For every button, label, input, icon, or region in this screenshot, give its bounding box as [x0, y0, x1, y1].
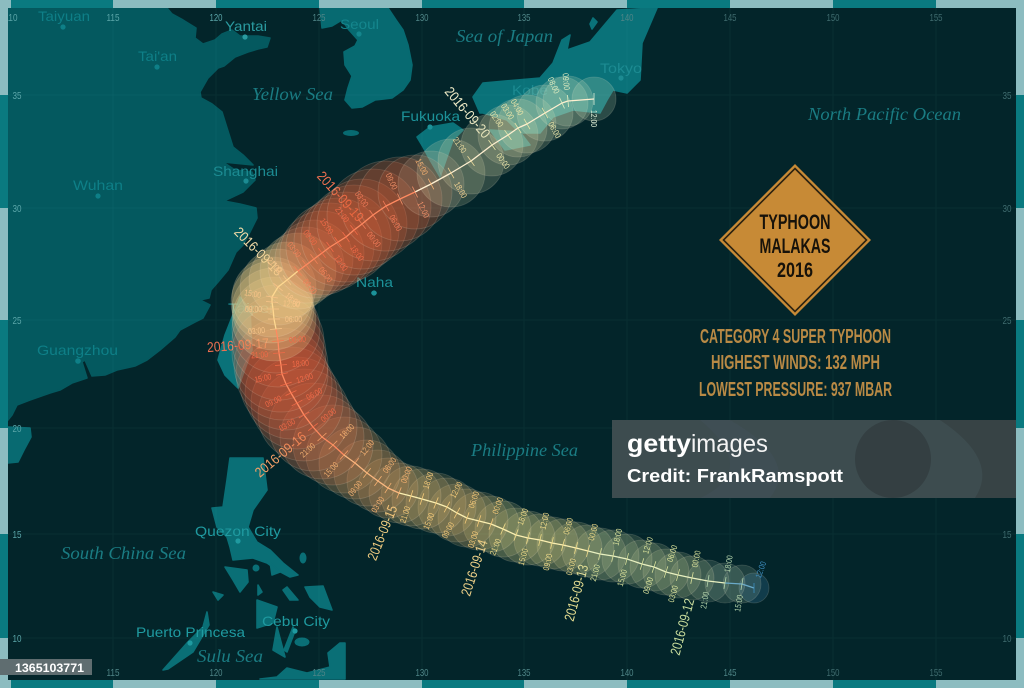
segment: 2016-09-14 amber: 00:00 — [490, 496, 505, 515]
segment: 2016-09-12 yellow green: 18:00 — [611, 527, 624, 546]
segment: 2016-09-13 yellow: 09:00 — [541, 552, 554, 571]
segment: 2016-09-13 yellow: 21:00 — [487, 537, 503, 557]
segment: 2016-09-18 red orange: 15:00 — [318, 216, 336, 236]
latitude labels right: 20 — [1002, 423, 1012, 435]
date: 2016-09-17: 2016-09-17 — [206, 335, 270, 355]
city: Taiyuan: Taiyuan — [38, 8, 90, 24]
segment: 2016-09-17 warm yellow: 06:00 — [285, 314, 302, 324]
city: Fukuoka — [401, 108, 460, 130]
warning sign: Typhoon Malakas 2016 — [719, 164, 871, 316]
segment: 2016-09-13 yellow — [487, 507, 600, 576]
longitude labels bottom: 150 — [826, 667, 840, 679]
segment: 2016-09-20 pale cream: 08:00 — [546, 76, 562, 95]
storm statistics: LOWEST PRESSURE: 937 MBAR — [699, 379, 892, 401]
longitude labels top: 145 — [724, 12, 737, 24]
segment: 2016-09-14 amber: 18:00 — [421, 471, 435, 490]
segment: 2016-09-18 red orange: 00:00 — [301, 277, 319, 296]
longitude labels bottom: 155 — [930, 667, 943, 679]
segment: 2016-09-18 red orange: 21:00 — [333, 205, 351, 224]
city: Seoul: Seoul — [340, 16, 379, 32]
segment: 2016-09-15 orange: 18:00 — [337, 422, 356, 441]
city: Puerto Princesa — [136, 624, 245, 646]
date: 2016-09-13: 2016-09-13 — [561, 563, 591, 623]
latitude labels left: 10 — [12, 633, 22, 645]
sea: Sulu Sea: Sulu Sea — [197, 646, 263, 666]
segment: 2016-09-16 red: 12:00 — [295, 371, 314, 385]
land: Sado — [590, 18, 597, 29]
segment: 2016-09-12 yellow green — [588, 527, 703, 603]
date: 2016-09-16: 2016-09-16 — [251, 428, 309, 480]
segment: 2016-09-11 pale green: 21:00 — [698, 591, 711, 609]
longitude labels bottom: 120 — [210, 667, 223, 679]
longitude labels bottom: 125 — [312, 667, 326, 679]
segment: 2016-09-13 yellow: 18:00 — [515, 507, 530, 526]
segment: 2016-09-14 amber — [398, 471, 505, 549]
longitude labels bottom — [106, 667, 943, 679]
segment: 2016-09-13 yellow: 06:00 — [561, 516, 575, 536]
city: Fukuoka: Fukuoka — [401, 108, 460, 124]
segment: 2016-09-16 red: 00:00 — [319, 406, 338, 424]
sea: North Pacific Ocean: North Pacific Ocean — [807, 104, 961, 124]
segment: 2016-09-13 yellow: 00:00 — [586, 522, 600, 542]
segment: 2016-09-15 orange — [298, 422, 414, 514]
longitude labels top: 150 — [826, 12, 840, 24]
land: Jeju — [343, 130, 359, 136]
image id badge — [0, 659, 92, 675]
latitude labels left: 20 — [12, 423, 22, 435]
land: Kyushu — [417, 123, 463, 177]
storm statistics — [699, 326, 892, 401]
city: Tokyo: Tokyo — [600, 60, 642, 76]
city: Yantai: Yantai — [225, 18, 267, 34]
city: Shanghai: Shanghai — [213, 163, 278, 179]
city: Kobe: Kobe — [512, 82, 548, 98]
segment: 2016-09-18 red orange: 18:00 — [348, 243, 366, 263]
latitude labels left: 30 — [12, 203, 22, 215]
longitude labels bottom: 115 — [106, 667, 120, 679]
segment: 2016-09-14 amber: 12:00 — [448, 480, 465, 500]
segment: 2016-09-18 red orange — [285, 205, 366, 296]
date: 2016-09-14: 2016-09-14 — [457, 537, 491, 598]
segment: 2016-09-14 amber: 03:00 — [466, 530, 480, 549]
segment: 2016-09-17 warm yellow: 15:00 — [244, 287, 262, 300]
sea: Philippine Sea: Philippine Sea — [470, 440, 578, 460]
segment: 2016-09-17 warm yellow — [244, 255, 307, 347]
segment: 2016-09-15 orange: 12:00 — [358, 438, 376, 457]
longitude labels top: 120 — [210, 12, 223, 24]
longitude labels top: 155 — [930, 12, 943, 24]
longitude labels top: 130 — [416, 12, 429, 24]
city: Tai'an — [138, 48, 177, 70]
segment: 2016-09-14 amber: 06:00 — [466, 490, 481, 509]
segment: 2016-09-15 orange: 00:00 — [398, 465, 414, 485]
longitude labels bottom: 135 — [518, 667, 531, 679]
time labels and ticks along the track — [244, 73, 768, 612]
segment: 2016-09-19 red to cream: 15:00 — [413, 157, 430, 177]
land: Taiwan — [218, 297, 252, 388]
date: 2016-09-18: 2016-09-18 — [231, 224, 286, 279]
segment: 2016-09-18 red orange: 06:00 — [317, 265, 335, 285]
latitude labels right: 25 — [1002, 315, 1012, 327]
city: Wuhan — [73, 177, 123, 199]
city labels — [37, 8, 642, 646]
segment: 2016-09-17 warm yellow: 12:00 — [283, 298, 301, 309]
segment: 2016-09-11 pale green — [698, 554, 748, 612]
latitude labels left: 15 — [12, 529, 22, 541]
land: Shikoku — [490, 130, 530, 150]
segment: 2016-09-15 orange: 09:00 — [346, 478, 364, 498]
segment: 2016-09-15 orange: 03:00 — [369, 495, 387, 514]
storm statistics: CATEGORY 4 SUPER TYPHOON — [700, 326, 891, 348]
segment: 2016-09-17 warm yellow: 18:00 — [283, 290, 303, 309]
storm size circles along the track — [231, 76, 769, 603]
segment: 2016-09-20 pale cream: 03:00 — [499, 102, 517, 121]
date: 2016-09-12: 2016-09-12 — [667, 597, 697, 657]
segment: 2016-09-16 red: 09:00 — [264, 393, 283, 409]
watermark panel: Credit: FrankRamspott — [627, 466, 843, 486]
segment: 2016-09-18 red orange: 12:00 — [332, 253, 350, 273]
image id badge: 1365103771 — [15, 661, 84, 675]
latitude labels right: 10 — [1002, 633, 1012, 645]
city: Taipei: Taipei — [228, 300, 273, 316]
longitude labels top: 115 — [106, 12, 120, 24]
longitude labels bottom: 130 — [416, 667, 429, 679]
segment: 2016-09-19 red to cream: 06:00 — [387, 213, 404, 233]
city: Naha: Naha — [356, 274, 393, 290]
segment: 2016-09-17 warm yellow: 03:00 — [248, 325, 266, 336]
city: Tokyo — [600, 60, 642, 81]
segment: 2016-09-19 red to cream: 12:00 — [415, 200, 432, 220]
sea: Sea of Japan: Sea of Japan — [456, 26, 553, 46]
segment: 2016-09-20 pale cream: 04:00 — [509, 97, 526, 117]
segment: 2016-09-19 red to cream: 21:00 — [451, 135, 469, 155]
latitude labels right: 30 — [1002, 203, 1012, 215]
segment: 2016-09-13 yellow: 12:00 — [538, 511, 551, 530]
watermark panel — [612, 420, 1016, 498]
date: 2016-09-20: 2016-09-20 — [442, 83, 494, 141]
segment: 2016-09-12 yellow green: 00:00 — [689, 549, 703, 568]
segment: 2016-09-20 pale cream: 09:00 — [561, 73, 572, 91]
segment: 2016-09-12 yellow green: 12:00 — [640, 536, 655, 555]
segment: 2016-09-16 red: 18:00 — [292, 358, 310, 369]
watermark panel: images — [691, 430, 768, 458]
latitude labels right: 15 — [1002, 529, 1012, 541]
segment: 2016-09-16 red — [251, 347, 338, 435]
warning sign: Typhoon Malakas 2016: TYPHOON — [760, 211, 830, 234]
segment: 2016-09-16 red: 15:00 — [254, 371, 272, 385]
warning sign: Typhoon Malakas 2016: MALAKAS — [760, 235, 830, 258]
city: Taiyuan — [38, 8, 90, 30]
longitude labels top: 140 — [620, 12, 634, 24]
city: Puerto Princesa: Puerto Princesa — [136, 624, 245, 640]
latitude labels left: 35 — [12, 90, 22, 102]
land: Luzon — [212, 458, 298, 577]
land: Hainan — [8, 427, 31, 463]
city: Wuhan: Wuhan — [73, 177, 123, 193]
land: Philippine islands — [163, 553, 345, 679]
segment: 2016-09-16 red: 06:00 — [304, 385, 324, 402]
segment: 2016-09-17 warm yellow: 21:00 — [265, 255, 284, 275]
segment: 2016-09-17 warm yellow: 00:00 — [289, 334, 307, 345]
latitude labels right: 35 — [1002, 90, 1012, 102]
latitude labels left — [12, 90, 22, 645]
segment: 2016-09-12 yellow green: 03:00 — [666, 584, 680, 603]
land: Korea — [320, 8, 412, 108]
date: 2016-09-19: 2016-09-19 — [314, 168, 368, 225]
segment: 2016-09-12 yellow green: 06:00 — [665, 544, 679, 563]
longitude labels bottom: 140 — [620, 667, 634, 679]
segment: 2016-09-20 pale cream: 00:00 — [494, 151, 512, 171]
segment: 2016-09-17 warm yellow: 09:00 — [245, 304, 262, 314]
latitude labels left: 25 — [12, 315, 22, 327]
segment: 2016-09-16 red: 21:00 — [251, 349, 269, 360]
segment: 2016-09-19 red to cream — [353, 135, 479, 249]
sea: South China Sea: South China Sea — [61, 543, 186, 563]
city: Naha — [356, 274, 393, 296]
segment: 2016-09-16 red: 03:00 — [277, 416, 297, 433]
segment: 2016-09-20 pale cream: 06:00 — [546, 120, 563, 140]
city: Cebu City: Cebu City — [262, 613, 330, 629]
date: 2016-09-15: 2016-09-15 — [364, 503, 400, 563]
segment: blue start: 12:00 — [753, 560, 768, 579]
segment: 2016-09-18 red orange: 03:00 — [285, 240, 303, 259]
segment: blue start — [753, 560, 768, 593]
segment: 2016-09-13 yellow: 03:00 — [564, 557, 578, 576]
longitude labels top: 110 — [4, 12, 18, 24]
longitude labels top: 135 — [518, 12, 531, 24]
land: Okinawa — [371, 291, 377, 295]
segment: 2016-09-15 orange: 15:00 — [322, 460, 340, 479]
land: Honshu — [473, 8, 657, 133]
city: Yantai — [225, 18, 267, 40]
segment: 2016-09-14 amber: 15:00 — [421, 511, 437, 531]
segment: 2016-09-12 yellow green: 15:00 — [615, 568, 629, 587]
city: Tai'an: Tai'an — [138, 48, 177, 64]
segment: 2016-09-20 pale cream — [484, 73, 599, 171]
warning sign: Typhoon Malakas 2016: 2016 — [777, 259, 813, 282]
segment: 2016-09-11 pale green: 15:00 — [732, 594, 745, 612]
segment: 2016-09-20 pale cream: 02:00 — [488, 109, 506, 129]
segment: 2016-09-12 yellow green: 09:00 — [641, 576, 655, 595]
segment: 2016-09-20 pale cream: 12:00 — [589, 110, 599, 127]
storm statistics: HIGHEST WINDS: 132 MPH — [711, 352, 880, 374]
segment: 2016-09-14 amber: 09:00 — [439, 520, 456, 540]
segment: 2016-09-15 orange: 06:00 — [380, 455, 399, 475]
land: China — [8, 8, 270, 420]
segment: 2016-09-11 pale green: 18:00 — [722, 554, 735, 573]
city: Guangzhou — [37, 342, 118, 364]
segment: 2016-09-13 yellow: 15:00 — [516, 547, 530, 566]
city: Quezon City: Quezon City — [195, 523, 281, 539]
city: Quezon City — [195, 523, 281, 544]
segment: 2016-09-18 red orange: 09:00 — [301, 228, 319, 247]
city: Guangzhou: Guangzhou — [37, 342, 118, 358]
segment: 2016-09-12 yellow green: 21:00 — [588, 563, 602, 582]
segment: 2016-09-19 red to cream: 03:00 — [353, 189, 371, 209]
sea: Yellow Sea: Yellow Sea — [252, 84, 333, 104]
longitude labels bottom: 145 — [724, 667, 737, 679]
latitude labels right — [1002, 90, 1012, 645]
segment: 2016-09-19 red to cream: 18:00 — [452, 180, 469, 200]
longitude labels top: 125 — [312, 12, 326, 24]
longitude labels top — [4, 12, 943, 24]
segment: 2016-09-14 amber: 21:00 — [398, 505, 412, 524]
date labels — [206, 83, 697, 657]
watermark panel: getty — [627, 430, 691, 458]
land masses — [8, 8, 657, 679]
segment: 2016-09-19 red to cream: 00:00 — [365, 230, 383, 249]
storm track line — [272, 99, 754, 588]
segment: 2016-09-15 orange: 21:00 — [298, 441, 317, 459]
segment: 2016-09-19 red to cream: 09:00 — [384, 172, 400, 191]
